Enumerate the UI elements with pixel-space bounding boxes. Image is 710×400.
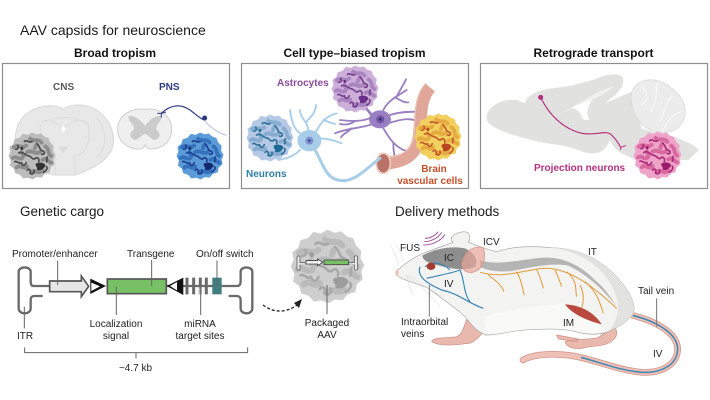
front paw (432, 320, 483, 345)
right triangle (167, 278, 183, 295)
blood vessel (376, 84, 430, 173)
label: size: ~4.7 kb (119, 363, 152, 374)
genetic cargo diagram (12, 249, 254, 374)
label: IC: IC (444, 253, 454, 264)
whiskers (388, 243, 442, 307)
label: promoter/enhancer: Promoter/enhancer (12, 249, 98, 260)
astrocyte capsid (331, 65, 379, 113)
neuron capsid (246, 114, 294, 162)
astrocyte cell (335, 79, 417, 162)
projection neuron (538, 95, 626, 150)
astrocytes label: Astrocytes (277, 78, 329, 89)
packaged AAV (291, 230, 364, 341)
nerve roots (480, 268, 617, 313)
label: miRNA target sites: target sites (176, 331, 224, 342)
intramuscular muscle (565, 304, 602, 324)
back shading (552, 248, 634, 331)
projection neurons label: Projection neurons (534, 163, 626, 174)
veins (419, 263, 483, 308)
brain vascular cells label: vascular cells (397, 176, 463, 187)
mouse illustration (388, 232, 678, 372)
label: IT: IT (588, 247, 597, 258)
PNS neuron (157, 106, 227, 135)
CNS label: CNS (53, 82, 74, 93)
promoter arrow (50, 276, 89, 297)
panel: cell type-biased tropism (242, 64, 468, 188)
label: FUS: FUS (400, 243, 420, 254)
label: localization signal: Localization (90, 319, 142, 330)
neurons label: Neurons (246, 169, 287, 180)
heading: cell type-biased tropism: Cell type–biased tropism (283, 46, 426, 60)
gray capsid (8, 132, 56, 180)
heading: delivery methods: Delivery methods (395, 204, 500, 219)
rear paw (557, 328, 617, 349)
label: transgene: Transgene (127, 249, 175, 260)
gray packaged capsid (291, 230, 364, 303)
packaged genome (297, 256, 358, 314)
transgene box (107, 279, 166, 294)
tail (523, 316, 678, 372)
panel: retrograde transport (480, 64, 708, 188)
brain vascular cells label: Brain (421, 164, 447, 175)
neuron cell (278, 105, 380, 181)
label: IV tail: IV (653, 349, 663, 360)
panel: broad tropism (2, 64, 230, 188)
packaged AAV label: Packaged (305, 318, 349, 329)
label: on/off switch: On/off switch (196, 249, 254, 260)
pink capsid (633, 131, 682, 180)
eye (427, 263, 435, 270)
label: intraorbital veins: Intraorbital (401, 317, 448, 328)
label: miRNA target sites: miRNA (184, 319, 216, 330)
brain and spinal cord (422, 247, 476, 269)
label: ITR: ITR (17, 331, 33, 342)
label: IV head: IV (444, 279, 454, 290)
blue capsid (176, 132, 224, 180)
title: AAV capsids for neuroscience (20, 22, 206, 38)
packaged AAV label: AAV (317, 330, 337, 341)
dashed arrow (263, 299, 302, 311)
label: IM: IM (563, 318, 574, 329)
size bracket (25, 347, 248, 358)
heading: broad tropism: Broad tropism (74, 46, 156, 60)
miRNA target sites (187, 278, 206, 294)
label: localization signal: signal (103, 331, 129, 342)
sagittal brain (486, 74, 699, 160)
coronal brain section (15, 105, 113, 175)
PNS label: PNS (159, 82, 180, 93)
on/off switch (212, 278, 222, 294)
heading: genetic cargo: Genetic cargo (20, 204, 104, 219)
vascular capsid (414, 113, 462, 161)
nose (395, 268, 398, 276)
label: tail vein: Tail vein (638, 286, 674, 297)
label: ICV: ICV (483, 237, 500, 248)
vector construct (19, 260, 252, 358)
belly highlight (484, 303, 605, 334)
FUS waves (423, 232, 445, 245)
body (397, 232, 634, 335)
heading: retrograde transport: Retrograde transport (533, 46, 654, 60)
leader lines (429, 285, 657, 327)
spinal cord section (118, 109, 172, 149)
left triangle (90, 279, 106, 294)
ventricle (462, 247, 485, 273)
label: intraorbital veins: veins (401, 329, 424, 340)
